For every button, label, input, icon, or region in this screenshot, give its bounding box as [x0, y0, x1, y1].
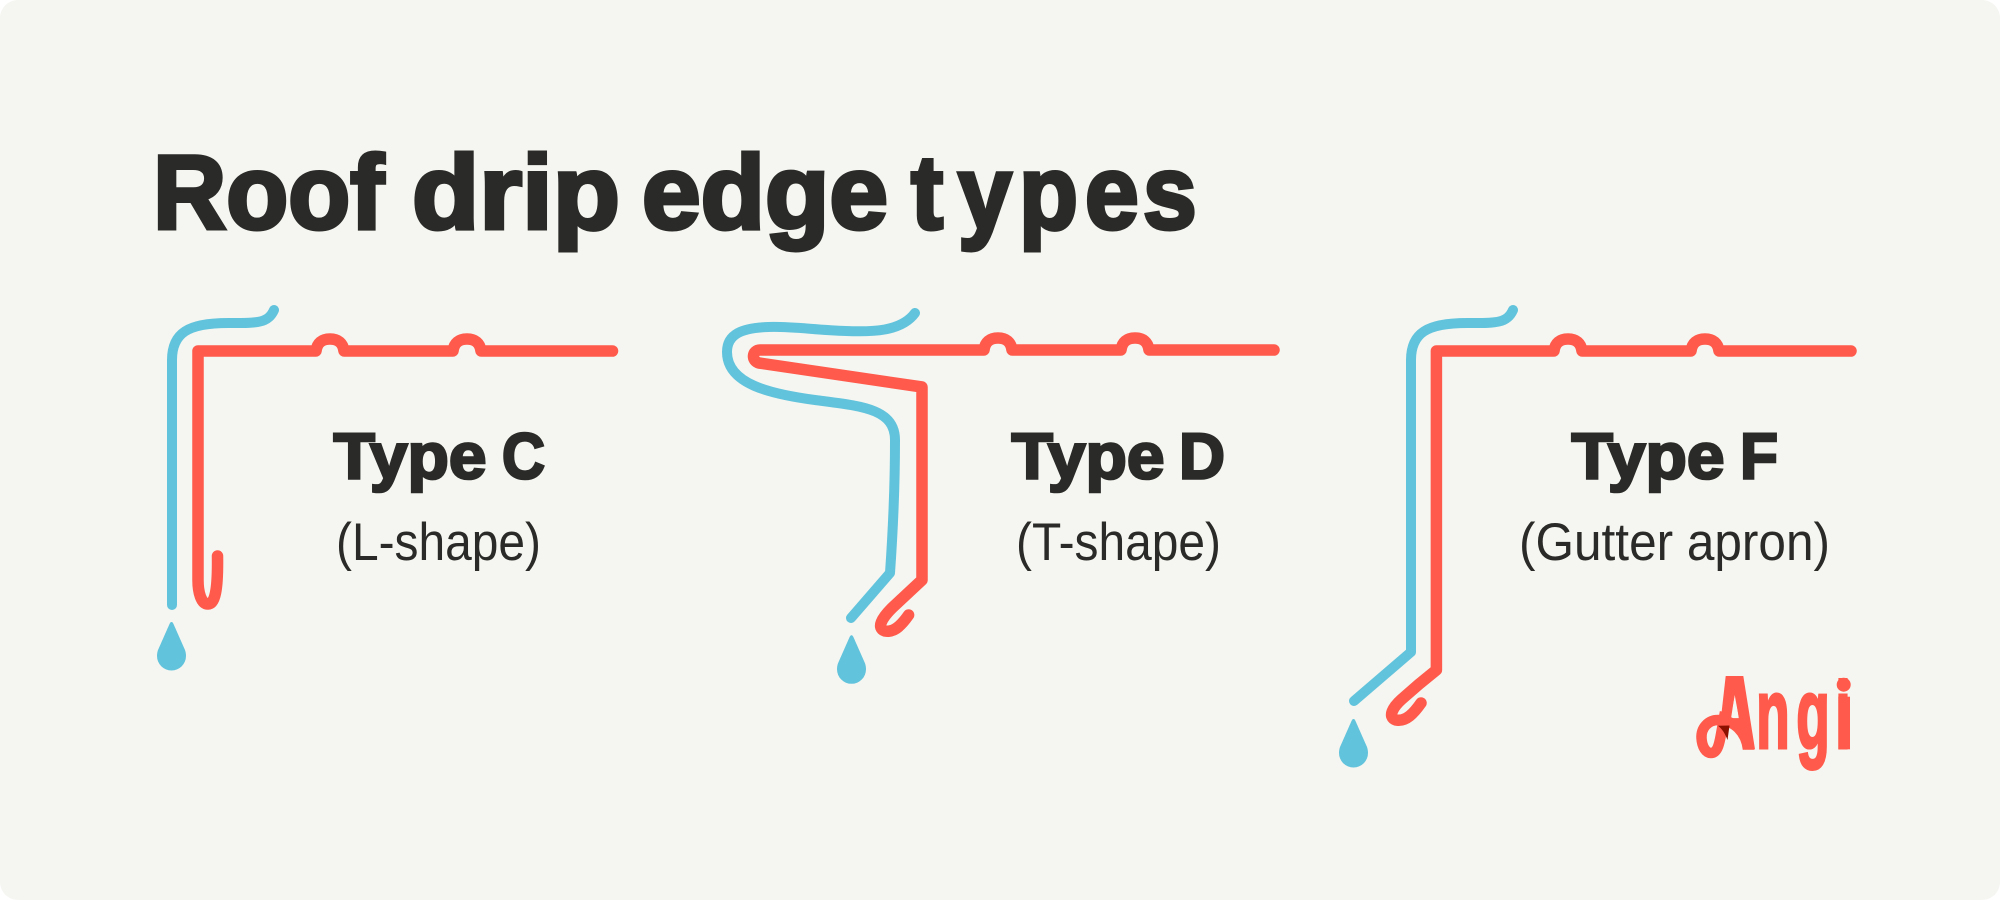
title — [153, 134, 1197, 252]
red drip edge, type C — [198, 339, 612, 604]
blue underlayment line, type D — [727, 313, 915, 618]
heading: Type C: Type — [334, 420, 486, 492]
icon: water drop, type F — [1339, 719, 1368, 768]
red drip edge, type F — [1392, 339, 1851, 720]
panel: type C — [157, 310, 612, 670]
heading: Type D: D — [1179, 420, 1225, 492]
subheading: L-shape: (L-shape) — [336, 513, 541, 572]
title: types — [911, 135, 1197, 251]
heading: Type D — [1012, 420, 1225, 492]
heading: Type C: C — [502, 420, 545, 492]
subheading: Gutter apron: (Gutter apron) — [1519, 513, 1830, 572]
heading: Type D: Type — [1012, 420, 1164, 492]
blue underlayment line, type F — [1354, 310, 1513, 701]
heading: Type C — [334, 420, 545, 492]
title: Roof — [153, 134, 385, 252]
blue underlayment line, type C — [172, 310, 274, 605]
title: edge — [642, 134, 888, 252]
panel: type F — [1339, 310, 1851, 768]
logo: Angi: Angi — [1715, 659, 1851, 770]
icon: water drop, type C — [157, 622, 186, 670]
panel: type D — [727, 313, 1274, 684]
subheading: T-shape: (T-shape) — [1016, 513, 1221, 572]
red drip edge, type D — [753, 338, 1274, 631]
heading: Type F: Type — [1572, 420, 1724, 492]
heading: Type F: F — [1740, 420, 1778, 492]
title: drip — [412, 134, 620, 252]
icon: water drop, type D — [837, 635, 866, 684]
